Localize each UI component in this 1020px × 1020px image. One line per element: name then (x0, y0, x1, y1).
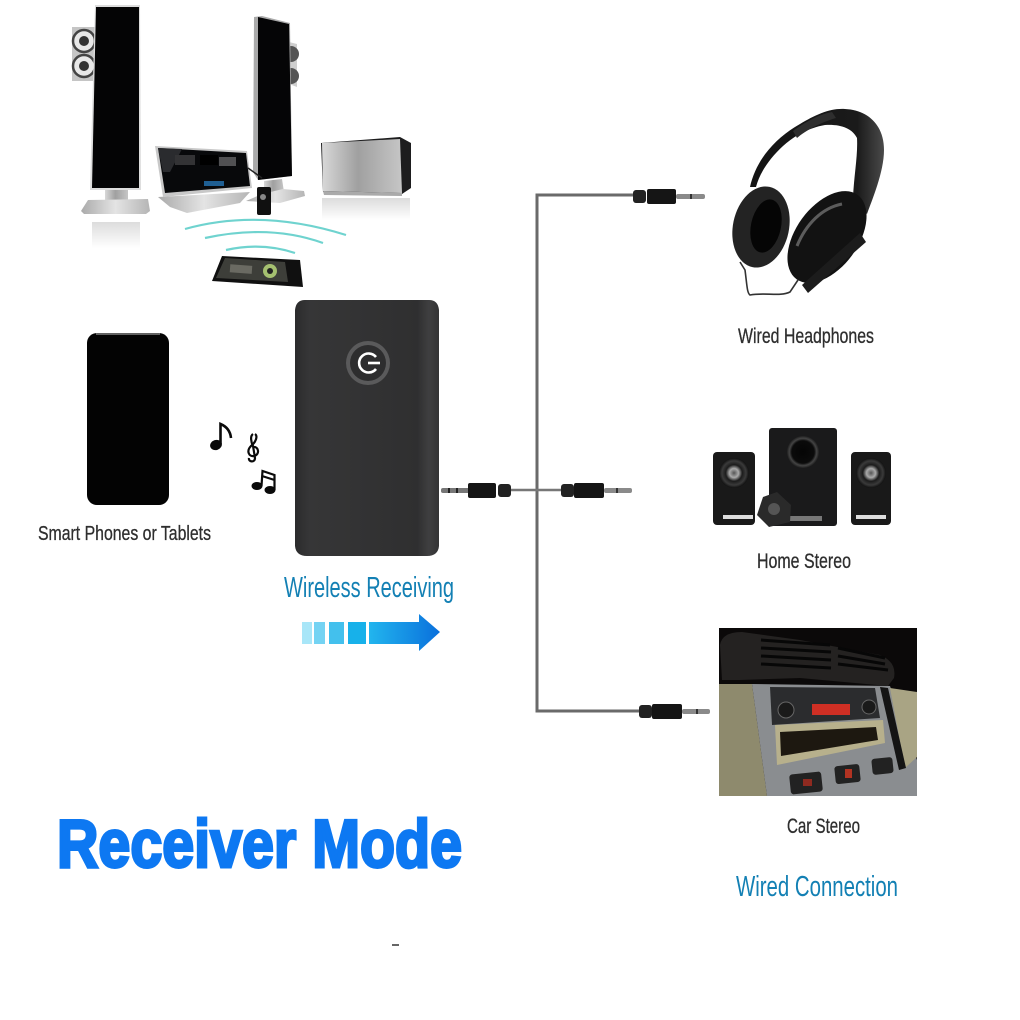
right satellite (851, 452, 891, 525)
label: car stereo: Car Stereo (787, 815, 860, 838)
audio jack: stereo (561, 483, 632, 498)
audio jack: headphones (633, 189, 705, 204)
label: smart phones or tablets: Smart Phones or Tablets (38, 522, 211, 545)
note: treble clef (248, 434, 258, 461)
storage tray (775, 720, 885, 765)
ear cup right (771, 177, 883, 297)
control pod (757, 492, 791, 527)
headphones (725, 109, 884, 297)
label: wireless receiving: Wireless Receiving (284, 572, 454, 604)
note: quaver (209, 424, 231, 452)
smartphone on table (212, 256, 303, 287)
ear pad left (725, 181, 797, 273)
illustration: home audio system with phone (72, 5, 411, 287)
radio unit (770, 687, 880, 725)
car stereo photo (719, 628, 917, 796)
audio cables (510, 195, 642, 711)
subwoofer (321, 137, 411, 220)
bluetooth adapter (248, 168, 271, 215)
right tower speaker (246, 16, 305, 203)
center media unit (155, 146, 252, 213)
home stereo speakers (713, 428, 891, 527)
audio jack: car (639, 704, 710, 719)
music notes (209, 424, 276, 494)
left tower speaker (72, 5, 150, 248)
label: wired connection: Wired Connection (736, 871, 898, 903)
audio jack: device (441, 483, 511, 498)
note: beamed (252, 471, 276, 494)
power button (346, 341, 390, 385)
small mark at bottom (392, 944, 399, 946)
interior trim (719, 684, 767, 796)
phone silhouette (87, 333, 169, 505)
title: receiver mode: Receiver Mode (57, 806, 462, 882)
left satellite (713, 452, 755, 525)
receiver device (295, 300, 439, 556)
arrow: signal direction (302, 614, 440, 651)
label: wired headphones: Wired Headphones (738, 325, 874, 348)
headband (750, 109, 884, 214)
control buttons (789, 771, 823, 795)
label: home stereo: Home Stereo (757, 550, 851, 573)
dashboard vent (720, 632, 894, 686)
subwoofer box (769, 428, 837, 526)
wireless waves (185, 220, 346, 253)
